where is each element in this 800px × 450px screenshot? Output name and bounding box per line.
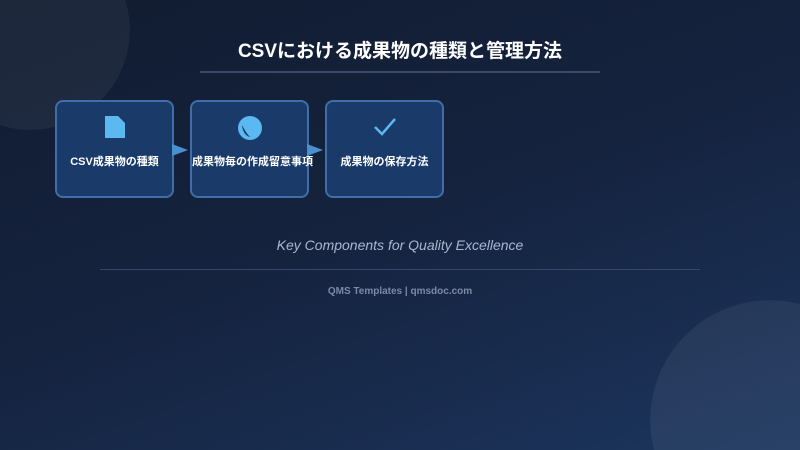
card: notes xyxy=(190,100,309,198)
card: types xyxy=(55,100,174,198)
card: storage: 成果物の保存方法 xyxy=(340,156,428,168)
card: types: CSV成果物の種類 xyxy=(70,156,159,168)
icon: check xyxy=(374,118,396,136)
subtitle: Key Components for Quality Excellence xyxy=(277,237,523,253)
card: notes: 成果物毎の作成留意事項 xyxy=(192,156,313,168)
title: CSVにおける成果物の種類と管理方法 xyxy=(238,41,562,62)
footer: QMS Templates | qmsdoc.com xyxy=(328,286,472,297)
arrow 1 xyxy=(172,144,188,156)
icon: compass xyxy=(238,116,262,140)
card: storage xyxy=(325,100,444,198)
arrow 2 xyxy=(307,144,323,156)
icon: document xyxy=(105,116,125,138)
